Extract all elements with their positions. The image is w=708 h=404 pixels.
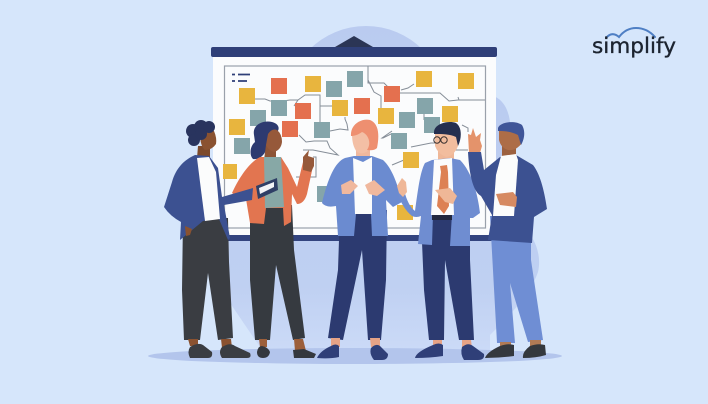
logo cloud arc	[606, 28, 655, 38]
dark hair	[434, 122, 461, 146]
navy jacket	[164, 155, 253, 240]
blue jacket	[322, 156, 402, 236]
trousers	[328, 210, 387, 340]
tablet screen	[259, 182, 274, 194]
white shirt	[353, 157, 372, 214]
floor shadow	[148, 348, 562, 364]
shoes	[317, 344, 388, 360]
shoes	[188, 344, 251, 358]
person 1: man in navy jacket	[164, 120, 278, 358]
orange jacket	[232, 157, 313, 226]
person 3: woman with orange hair	[317, 120, 402, 360]
sticky notes	[223, 71, 474, 220]
raised hand	[468, 128, 482, 153]
logo	[592, 28, 676, 58]
face	[200, 130, 216, 150]
white shirt	[493, 154, 518, 216]
face	[266, 130, 282, 152]
hand on chest	[496, 192, 517, 207]
person 5: man in navy jacket with raised hand	[468, 122, 547, 358]
belt	[432, 215, 452, 220]
whiteboard	[211, 36, 497, 241]
inner frame	[224, 66, 486, 228]
blue hair	[498, 122, 524, 145]
trousers	[182, 218, 233, 340]
ankles	[331, 338, 380, 347]
person 2: woman in orange jacket	[232, 122, 316, 358]
shoes	[485, 344, 546, 358]
orange hair	[351, 120, 378, 150]
white shirt	[431, 158, 454, 215]
board top bar	[211, 47, 497, 57]
board legend marks	[232, 74, 250, 81]
white shirt	[197, 157, 220, 221]
neck	[438, 148, 454, 166]
glasses	[434, 137, 447, 143]
neck	[502, 145, 516, 160]
hair back	[251, 122, 279, 159]
face	[352, 131, 371, 153]
ankles	[259, 339, 306, 351]
hand pointing	[303, 150, 314, 172]
ankles	[188, 339, 232, 348]
logo wordmark: simplify	[592, 34, 676, 58]
trousers	[490, 216, 543, 343]
board mount	[335, 36, 373, 47]
orange tie	[437, 165, 449, 214]
face	[435, 132, 458, 157]
trousers	[421, 218, 474, 340]
curly hair	[186, 120, 215, 146]
face	[499, 128, 522, 150]
neck	[264, 145, 276, 160]
connector lines	[255, 66, 485, 177]
shoes	[257, 346, 316, 358]
navy jacket	[468, 152, 547, 243]
neck	[356, 146, 370, 162]
hands	[341, 180, 385, 196]
neck	[197, 146, 210, 158]
background shapes	[225, 26, 539, 350]
ankles	[500, 340, 541, 348]
board bottom bar	[225, 235, 495, 241]
hand left	[397, 178, 407, 197]
hand in pocket	[185, 226, 192, 236]
ankles	[433, 340, 472, 348]
hand right	[435, 188, 457, 204]
teal top	[264, 157, 284, 208]
tablet	[256, 178, 278, 199]
person 4: man with glasses and orange tie	[397, 122, 484, 360]
trousers	[250, 205, 305, 340]
shoes	[415, 344, 484, 360]
blue jacket	[398, 158, 480, 246]
